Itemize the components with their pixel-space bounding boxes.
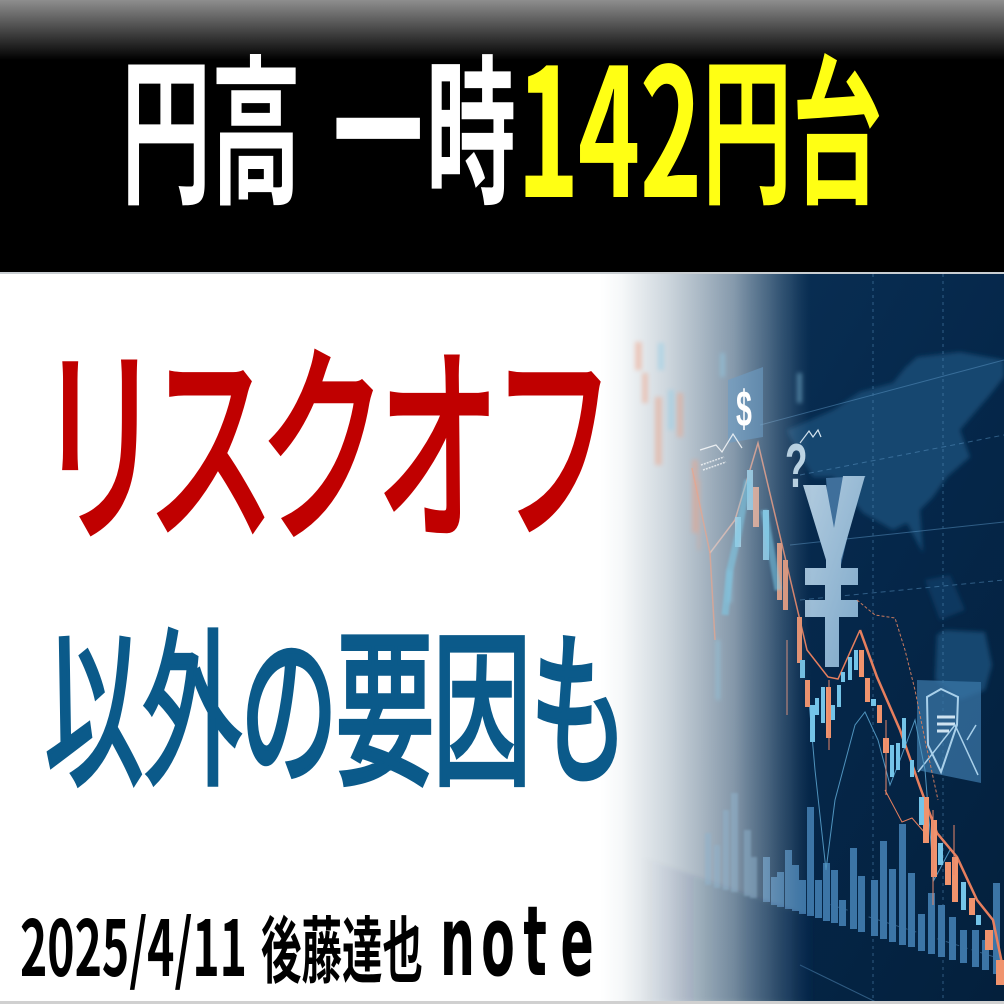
icon: yen symbol	[803, 476, 866, 667]
grid lines	[760, 274, 1004, 1004]
yellow title text	[517, 0, 882, 249]
subheading: 以外の要因も: も	[530, 576, 628, 820]
bottom edge line	[0, 1001, 1004, 1004]
heading: リスクオフ: ク	[259, 279, 387, 586]
subheading: 以外の要因も: 以	[45, 576, 143, 820]
small zigzag lines	[800, 430, 821, 443]
icon: shield panel	[917, 680, 981, 783]
title banner background	[0, 0, 1004, 274]
orange candles	[753, 487, 1004, 985]
footer: date, author, note	[20, 885, 594, 999]
panel: financial chart image	[600, 274, 1004, 1004]
gradient fade overlay	[600, 274, 812, 1001]
heading: リスクオフ: フ	[493, 278, 615, 585]
subheading: 以外の要因も: 因	[433, 576, 531, 820]
white title text	[121, 45, 516, 226]
volume bars	[763, 807, 1000, 974]
yellow title text: 円	[702, 45, 792, 226]
subheading: 以外の要因も: 要	[336, 576, 434, 820]
date: 2025/4/11	[20, 889, 247, 999]
heading: リスクオフ: オ	[377, 278, 499, 585]
thin dotted trend	[857, 600, 938, 800]
white title text: 高	[211, 45, 301, 226]
orange trend lines	[710, 443, 1004, 973]
candle wicks	[787, 640, 954, 905]
faded blue candles	[658, 343, 802, 700]
author name: 後藤達也	[261, 913, 423, 993]
white title text: 一	[333, 45, 423, 226]
yellow title text: 台	[792, 45, 882, 226]
faded orange candles	[635, 342, 700, 550]
white page background	[0, 272, 1004, 1004]
faded orange line	[692, 468, 715, 640]
heading: 円高 一時 142円台	[121, 0, 882, 249]
icon: question mark: ?	[785, 431, 807, 500]
lower dark band	[640, 856, 812, 1001]
icon: dollar panel: $	[736, 379, 752, 437]
heading: リスクオフ: ス	[147, 279, 275, 586]
white title text: 円	[121, 45, 211, 226]
heading: リスクオフ	[36, 278, 615, 586]
faded light blue candle cluster	[725, 480, 778, 615]
subheading: 以外の要因も: 外	[143, 576, 241, 820]
subheading: 以外の要因も	[45, 576, 628, 820]
icon: dollar panel	[700, 367, 763, 470]
heading: リスクオフ: リ	[36, 279, 164, 586]
world map	[787, 352, 1004, 700]
note logo text: note	[440, 885, 594, 999]
candles	[735, 470, 1004, 985]
faded volume bars	[705, 793, 757, 898]
subheading: 以外の要因も: の	[240, 576, 338, 820]
thin blue indicator line	[808, 690, 950, 880]
white title text: 時	[426, 45, 516, 226]
blue candles	[735, 470, 981, 925]
